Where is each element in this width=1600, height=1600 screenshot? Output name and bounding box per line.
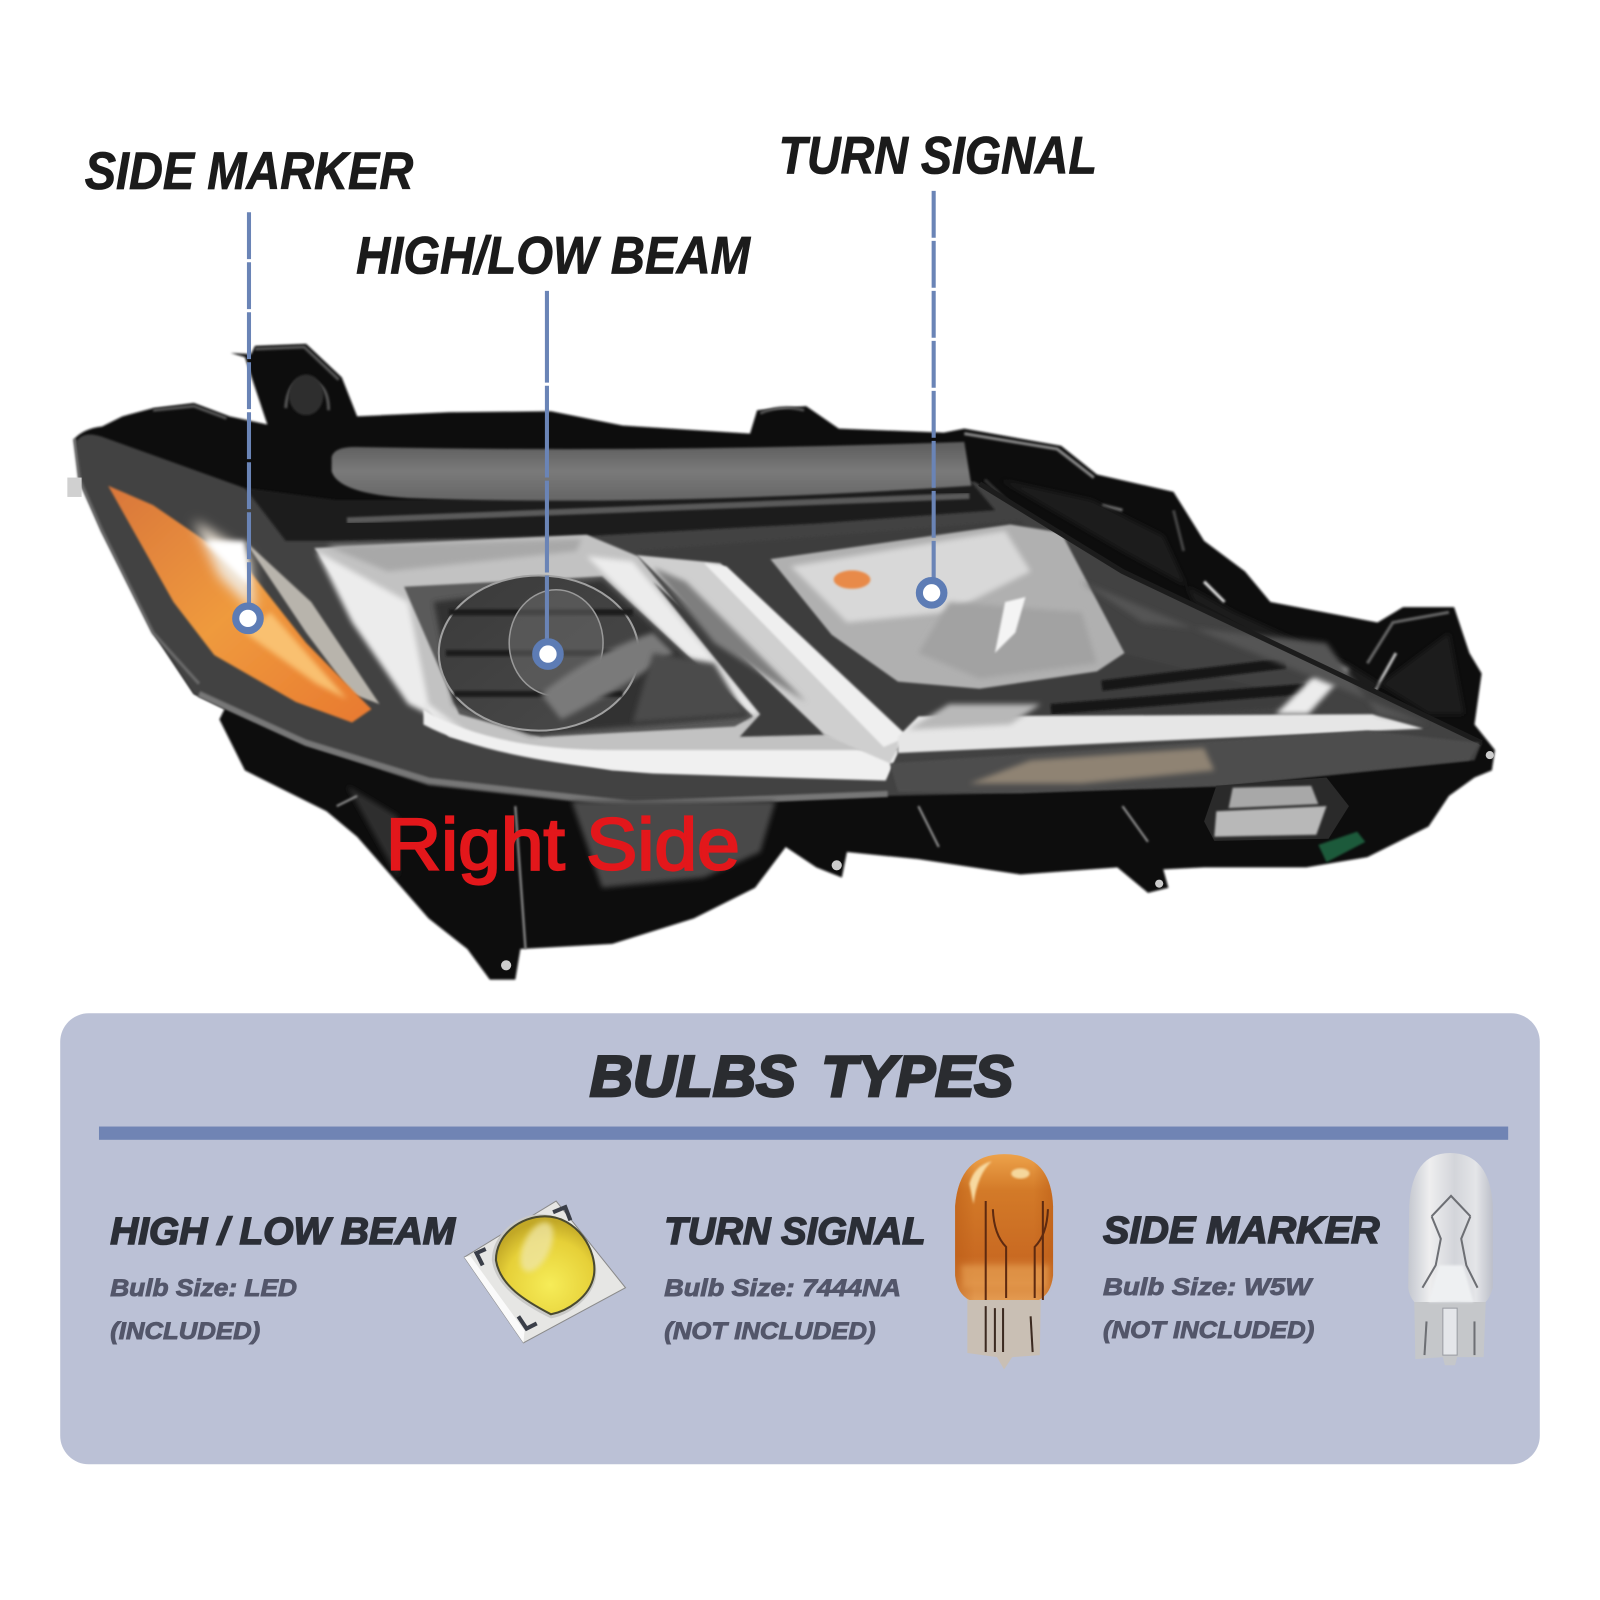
right white trim strip [898, 714, 1423, 753]
side marker text: SIDE MARKER [85, 142, 413, 201]
turn signal leader line [932, 191, 936, 587]
panel heading [590, 1045, 1013, 1109]
tan reflection in trim [969, 748, 1214, 784]
chrome diagonal blade [637, 555, 903, 763]
not included note: (NOT INCLUDED) [664, 1318, 876, 1345]
left edge highlight [74, 439, 199, 684]
icon: clear wedge bulb [1408, 1153, 1493, 1365]
column: high low beam [110, 1201, 626, 1345]
side lens silver wedge [245, 541, 380, 704]
not included note: (NOT INCLUDED) [1103, 1317, 1314, 1344]
panel: bulbs types [60, 1013, 1540, 1464]
side marker dot [236, 606, 260, 631]
rear housing sheen [1000, 480, 1464, 714]
mounting pegs [501, 751, 1494, 970]
turn signal housing [770, 524, 1124, 689]
bulb size: Bulb Size: W5W [1103, 1274, 1313, 1301]
projector chrome surround [314, 535, 898, 778]
lower lens rim [199, 694, 888, 804]
lower lens trim [890, 731, 1480, 793]
band stripes [347, 496, 969, 520]
amber highlight [194, 520, 255, 612]
lower housing glints [347, 786, 776, 888]
headlight black housing [74, 344, 1495, 980]
turn signal dark bands [1051, 663, 1306, 709]
bulb size: Bulb Size: 7444NA [664, 1275, 901, 1302]
socket detail [289, 374, 323, 415]
amber glow [245, 612, 347, 699]
column: turn signal [664, 1154, 1053, 1369]
projector inner cavity [404, 577, 753, 737]
heading rule [99, 1127, 1508, 1140]
right corner glare [1276, 663, 1349, 714]
right side label: Right Side [386, 802, 740, 885]
upper black band [245, 480, 995, 541]
amber side marker [108, 486, 371, 722]
lit chrome band [704, 563, 908, 747]
lower white strip [423, 709, 898, 781]
panel heading: TYPES [821, 1045, 1013, 1109]
column title: TURN SIGNAL [664, 1210, 926, 1252]
icon: amber wedge bulb [955, 1154, 1053, 1369]
mounting bracket highlights [153, 347, 1449, 704]
chrome white patches [316, 539, 760, 735]
left clip tab [67, 478, 82, 497]
high low beam text: HIGH/LOW BEAM [356, 226, 752, 285]
label: side marker [85, 142, 413, 631]
panel heading: BULBS [590, 1045, 796, 1109]
orange reflector spot [834, 570, 870, 589]
region between blade and turn signal [638, 520, 1327, 735]
dark wedge between frame and blade [653, 582, 824, 737]
reflector box [1204, 778, 1349, 841]
lens dark slats [446, 612, 638, 694]
lens top edge [980, 484, 1482, 743]
bulb size: Bulb Size: LED [110, 1275, 297, 1302]
lens outer cover [77, 434, 1482, 808]
label: turn signal [779, 126, 1097, 605]
included note: (INCLUDED) [110, 1318, 260, 1345]
high low beam leader line [545, 291, 549, 648]
green circuit bit [1318, 832, 1365, 862]
headlight assembly [67, 344, 1495, 980]
icon: led chip [464, 1201, 626, 1343]
label: high low beam [356, 226, 752, 666]
high low beam dot [536, 642, 560, 666]
lens corner gray [1082, 582, 1429, 724]
side marker leader line [247, 212, 251, 612]
blade dark inset [653, 567, 806, 702]
projector lens [439, 576, 673, 731]
column title: SIDE MARKER [1103, 1209, 1380, 1251]
column: side marker [1103, 1153, 1493, 1365]
turn signal dot [919, 581, 944, 605]
turn signal text: TURN SIGNAL [779, 126, 1097, 185]
trim hatch area [908, 704, 1041, 730]
right cavity gray [633, 653, 745, 722]
column title: HIGH / LOW BEAM [110, 1210, 457, 1252]
rubber seal strip [332, 442, 971, 501]
panel background [60, 1013, 1540, 1464]
